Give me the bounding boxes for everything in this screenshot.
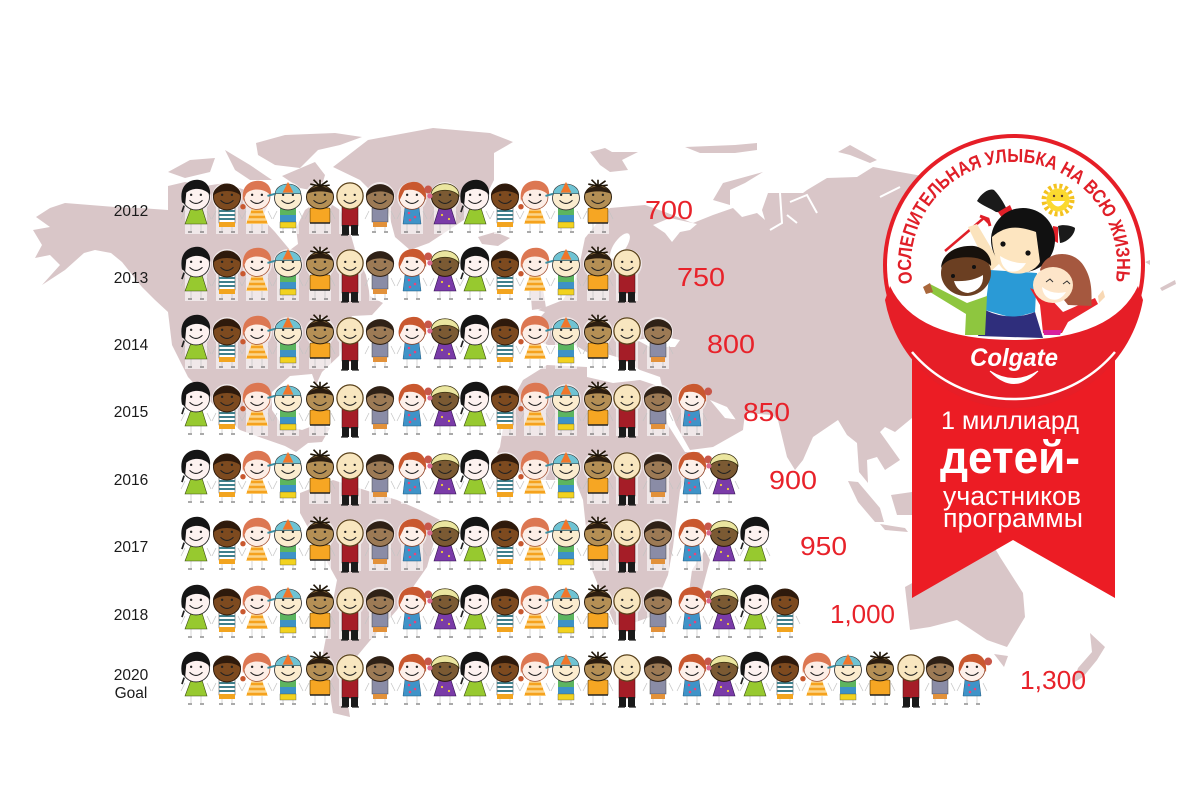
illustration: girl with brown hair [1030,254,1105,335]
year labels: 2013 [114,270,148,287]
ribbon text: 1 миллиард [941,407,1079,435]
values in millions: 950 [800,531,847,561]
white edge arc [912,352,1115,399]
ribbon text: участников [943,481,1081,511]
year labels [114,203,149,702]
badge circle [883,134,1145,396]
year labels: 2014 [114,337,149,354]
values in millions: 700 [645,195,693,225]
badge lower crescent [885,286,1143,408]
row of children 2013 [181,247,642,302]
ribbon text: детей- [940,432,1080,483]
year labels: 2015 [114,404,148,421]
row of children 2017 [181,517,770,572]
icon: sun [1044,186,1072,214]
year labels: 2016 [114,472,148,489]
ribbon text: программы [943,503,1083,533]
values in millions: 800 [707,329,755,359]
logo: Colgate: Colgate [970,344,1058,372]
values in millions: 1,000 [830,599,895,629]
values in millions [645,195,1086,695]
inland seas [606,218,697,347]
year labels: 2020 [114,667,149,684]
row of children 2012 [181,180,613,235]
year labels: 2012 [114,203,148,220]
row of children 2014 [181,315,673,370]
logo: Colgate [970,344,1058,384]
year labels: Goal [115,685,147,702]
row of children 2020 goal [181,652,992,707]
row of children 2015 [181,382,712,437]
values in millions: 1,300 [1020,665,1086,695]
values in millions: 750 [677,262,725,292]
world map [33,128,1176,717]
curved slogan: ОСЛЕПИТЕЛЬНАЯ УЛЫБКА НА ВСЮ ЖИЗНЬ [898,148,1130,284]
values in millions: 850 [743,397,790,427]
row of children 2018 [181,585,800,640]
illustration: boy [923,246,991,335]
values in millions: 900 [769,465,817,495]
year labels: 2017 [114,539,148,556]
badge [883,134,1145,400]
year labels: 2018 [114,607,148,624]
row of children 2016 [181,450,739,505]
ribbon [912,340,1115,598]
ribbon text [940,407,1083,533]
illustration: girl with toothbrush [945,189,1075,338]
